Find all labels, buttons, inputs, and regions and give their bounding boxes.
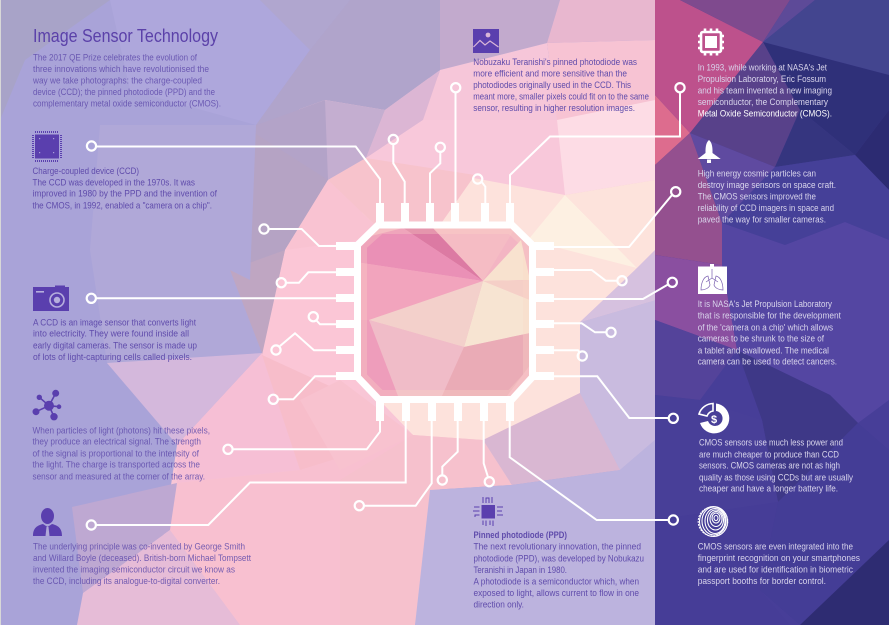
photodiode description text: sensor, resulting in higher resolution images. [473,103,635,113]
icon: dollar chart: $ [711,414,717,426]
fingerprint text: fingerprint recognition on your smartphones [698,553,860,563]
circuit traces [96,93,680,525]
space text: reliability of CCD imagers in space and [698,203,834,213]
intro text: complementary metal oxide semiconductor (CMOS). [33,99,221,109]
fingerprint text: passport booths for border control. [698,576,826,586]
photodiode description text: Nobuzaku Teranishi's pinned photodiode was [473,57,637,67]
power text: sensors. CMOS cameras are not as high [699,461,840,471]
camera text [33,317,197,362]
icon: image [473,29,499,53]
camera text: A CCD is an image sensor that converts light [33,317,196,327]
CCD text: the CMOS, in 1992, enabled a "camera on a chip". [32,200,212,210]
trace end circles [87,83,685,530]
inventors text: The underlying principle was co-invented by George Smith [33,541,245,551]
CCD text: The CCD was developed in the 1970s. It was [32,177,195,187]
photodiode description text: photodiodes originally used in the CCD. This [473,80,631,90]
CMOS intro text: semiconductor, the Complementary [698,97,828,107]
PPD text: direction only. [474,600,524,610]
icon: PPD chip [473,497,503,526]
CMOS intro text: and his team invented a new imaging [698,86,832,96]
fingerprint text: and are used for identification in biometric [698,565,853,575]
photodiode description text [473,57,649,113]
inventors text [33,541,251,586]
intro text: way we take photographs: the charge-coupled [32,76,202,86]
camera text: of lots of light-capturing cells called pixels. [33,352,192,362]
CMOS intro text: In 1993, while working at NASA's Jet [698,62,827,72]
power text [699,438,853,494]
photons text: of the signal is proportional to the intensity of [32,448,199,458]
photons text [32,425,210,481]
chip core facets [361,228,529,396]
chip pins [336,203,554,421]
power text: cheaper and have a longer battery life. [699,484,838,494]
background: dark low-poly panel [655,0,889,625]
icon: CMOS chip [698,28,724,56]
title: Image Sensor Technology [33,26,218,46]
medical text: It is NASA's Jet Propulsion Laboratory [698,299,832,309]
PPD text [474,530,644,610]
space text: paved the way for smaller cameras. [698,215,826,225]
photons text: they produce an electrical signal. The strength [32,437,201,447]
icon: rocket [698,140,721,163]
medical text: of the 'camera on a chip' which allows [698,322,833,332]
fingerprint text [698,541,860,586]
icon: camera [33,286,69,311]
CCD text [32,166,217,210]
PPD text: exposed to light, allows current to flow in one [474,588,639,598]
space text: destroy image sensors on space craft. [698,180,836,190]
medical text: cameras to be shrunk to the size of [698,334,824,344]
photons text: When particles of light (photons) hit these pixels, [32,425,210,435]
inventors text: the CCD, including its analogue-to-digital converter. [33,576,220,586]
fingerprint text: CMOS sensors are even integrated into the [698,541,853,551]
photons text: the light. The charge is transported across the [32,460,200,470]
PPD text: Teranishi in Japan in 1980. [474,565,567,575]
CCD text: Charge-coupled device (CCD) [32,166,139,176]
background: low-poly light area [0,0,655,625]
camera text: into electricity. They were found inside all [33,329,189,339]
camera text: early digital cameras. The sensor is made up [33,340,197,350]
photodiode description text: meant more, smaller pixels could fit on to the same [473,91,649,101]
PPD text: photodiode (PPD), was developed by Nobukazu [474,553,644,563]
power text: are much cheaper to produce than CCD [699,449,839,459]
space text: The CMOS sensors improved the [698,192,816,202]
icon: CCD chip [33,132,61,161]
PPD text: A photodiode is a semiconductor which, when [474,576,639,586]
inventors text: invented the imaging semiconductor circuit we know as [33,565,235,575]
space text [698,169,836,225]
medical text [698,299,841,367]
medical text: a tablet and swallowed. The medical [698,345,829,355]
icon: lungs [698,264,727,294]
PPD text: The next revolutionary innovation, the pinned [474,542,641,552]
photons text: sensor and measured at the corner of the array. [32,471,205,481]
power text: quality as those using CCDs but are usually [699,472,853,482]
medical text: camera can be used to detect cancers. [698,357,837,367]
intro text [32,52,221,109]
power text: CMOS sensors use much less power and [699,438,843,448]
CCD text: improved in 1980 by the PPD and the invention of [32,189,217,199]
CMOS intro text: Propulsion Laboratory, Eric Fossum [698,74,826,84]
CMOS intro text [698,62,832,119]
inventors text: and Willard Boyle (deceased). British-born Michael Tompsett [33,553,251,563]
medical text: that is responsible for the development [698,311,841,321]
CMOS intro text: Metal Oxide Semiconductor (CMOS). [698,109,832,119]
icon: fingerprint [698,506,728,536]
space text: High energy cosmic particles can [698,169,816,179]
intro text: three innovations which have revolutionised the [33,64,209,74]
photodiode description text: more efficient and more sensitive than the [473,68,627,78]
PPD text: Pinned photodiode (PPD) [474,530,567,540]
chip frame [358,225,532,400]
icon: person [33,508,62,536]
intro text: The 2017 QE Prize celebrates the evolution of [33,52,197,62]
intro text: device (CCD); the pinned photodiode (PPD) and the [33,87,215,97]
icon: network [33,390,61,420]
icon: dollar chart [699,404,729,433]
